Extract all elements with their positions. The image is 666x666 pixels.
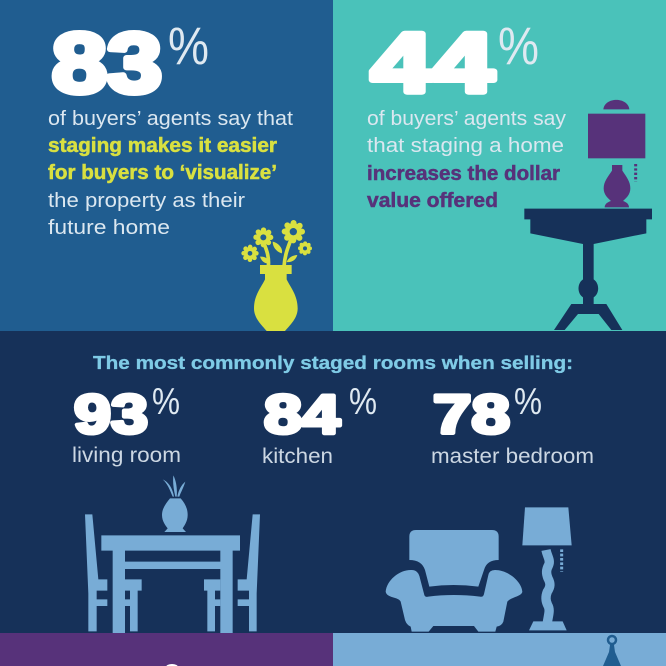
stat: 93% living room: % [152, 381, 180, 422]
icon: left chair [85, 514, 142, 631]
stat: 83% [52, 16, 209, 110]
text block: dollar value: of buyers’ agents say [367, 108, 566, 130]
text block: dollar value [367, 108, 566, 212]
text block: dollar value: increases the dollar [367, 163, 560, 185]
stat: 78% master bedroom: % [514, 381, 542, 422]
icon: dining table with chairs [85, 475, 260, 633]
heading: most commonly staged rooms: The most commonly staged rooms when selling: [93, 352, 573, 373]
stat: 78% master bedroom: master bedroom [431, 445, 594, 468]
stat: 93% living room: 93 [74, 383, 148, 445]
icon: table lamp [588, 100, 645, 207]
text block: dollar value: that staging a home [367, 135, 564, 157]
stat: 44% [371, 16, 539, 110]
text block: visualize: staging makes it easier [48, 135, 277, 157]
stat: 93% living room: living room [72, 444, 181, 467]
stat: 83%: 83 [52, 16, 162, 110]
stat: 83%: % [168, 17, 209, 76]
text block: visualize: of buyers’ agents say that [48, 108, 293, 130]
icon: side table [524, 209, 652, 330]
icon: flower vase [244, 223, 310, 331]
icon: right chair [204, 514, 260, 631]
text block: visualize [48, 108, 293, 239]
text block: dollar value: value offered [367, 190, 498, 212]
icon: lamp finial [603, 636, 621, 666]
panel: light blue bottom [333, 633, 666, 666]
stat: 78% master bedroom [431, 381, 594, 468]
text block: visualize: future home [48, 217, 170, 239]
icon: vase with leaves [162, 475, 188, 532]
stat: 84% kitchen: kitchen [262, 445, 333, 468]
stat: 84% kitchen: % [349, 381, 377, 422]
icon: table [101, 535, 240, 633]
text block: visualize: for buyers to ‘visualize’ [48, 162, 277, 184]
panel: 83 percent [0, 0, 333, 331]
text block: visualize: the property as their [48, 190, 245, 212]
decorative number tops [166, 664, 178, 666]
stat: 44%: 44 [371, 16, 494, 110]
icon: floor lamp [522, 507, 572, 630]
stat: 93% living room [72, 381, 181, 467]
stat: 78% master bedroom: 78 [433, 383, 510, 445]
panel: 44 percent [333, 0, 666, 331]
icon: armchair [386, 530, 522, 632]
stat: 44%: % [498, 17, 539, 76]
stat: 84% kitchen: 84 [264, 383, 340, 445]
panel: purple bottom [0, 633, 333, 666]
stat: 84% kitchen [262, 381, 377, 468]
